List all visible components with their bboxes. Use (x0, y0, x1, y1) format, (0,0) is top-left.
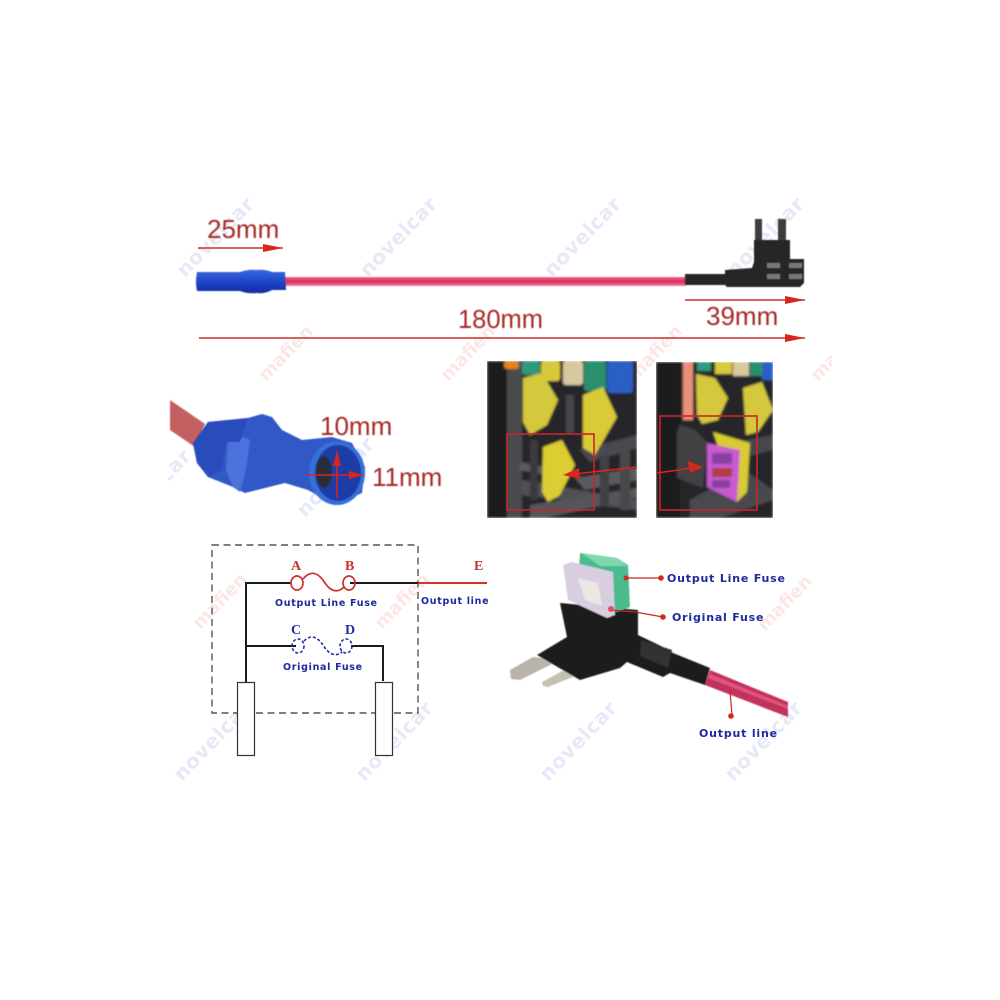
watermarks: novelcar (108, 444, 196, 533)
watermarks: novelcar (538, 192, 626, 281)
metal blades (510, 657, 560, 680)
watermarks: novelcar (721, 192, 809, 281)
callout box (507, 434, 594, 510)
dimension: 11mm: 11mm (372, 462, 442, 492)
dimension: 25mm: 25mm (207, 214, 279, 244)
panel: circuit schematic (212, 545, 489, 756)
letters (291, 559, 483, 638)
watermarks: novelcar (291, 432, 379, 521)
watermarks: novelcar (171, 192, 259, 281)
letters: D (345, 623, 355, 638)
letters: E (474, 559, 483, 574)
watermarks: novelcar (354, 192, 442, 281)
measurement arrows (307, 450, 364, 498)
label: output line: Output line (699, 727, 778, 740)
dimension: 180mm: 180mm (458, 306, 543, 334)
output line fuse symbol (291, 573, 355, 591)
red wire (705, 670, 788, 717)
watermarks: mafien (254, 321, 318, 385)
watermarks: novelcar (719, 696, 807, 785)
dimension: 39mm (685, 300, 805, 331)
pointer: output line (728, 690, 734, 719)
letters: A (291, 559, 302, 574)
label: output line fuse: Output Line Fuse (275, 598, 378, 609)
output line wire (418, 582, 487, 584)
watermarks: novelcar (350, 696, 438, 785)
icon: blue connector body (193, 414, 365, 505)
terminal blades (238, 682, 254, 756)
wiring (246, 583, 418, 682)
watermarks: novelcar (168, 696, 256, 785)
watermarks: mafien (806, 321, 870, 385)
label: output line: Output line (421, 596, 489, 607)
watermarks: mafien (436, 321, 500, 385)
panel: fuse tap photo (510, 553, 788, 740)
watermarks (168, 198, 832, 780)
label: output line fuse: Output Line Fuse (667, 572, 786, 585)
wire (284, 277, 686, 286)
watermarks: mafien (623, 321, 687, 385)
pointer: original fuse (608, 606, 666, 620)
letters: B (345, 559, 354, 574)
watermarks: mafien (370, 569, 434, 633)
watermarks: novelcar (534, 696, 622, 785)
icon: red wire end (170, 400, 205, 447)
label: original fuse: Original Fuse (672, 611, 764, 624)
lavender fuse (563, 562, 615, 618)
arrow (657, 461, 703, 473)
black plug and sheath (537, 603, 710, 685)
green fuse (578, 553, 630, 612)
dashed enclosure (212, 545, 418, 713)
icon: black fuse tap (685, 219, 804, 287)
icon: blue bullet connector (196, 270, 286, 293)
watermarks: mafien (188, 569, 252, 633)
watermarks: mafien (753, 571, 817, 635)
panel: fuse tap cable with dimensions (196, 214, 805, 338)
dimension: 39mm: 39mm (706, 301, 778, 331)
label: original fuse: Original Fuse (283, 662, 363, 673)
panel: fuse box before (487, 361, 637, 518)
arrow (563, 467, 637, 479)
panel: connector close-up (170, 400, 442, 505)
original fuse symbol (292, 637, 352, 655)
panel: fuse box after (656, 362, 773, 518)
pointer: output line fuse (624, 575, 664, 581)
callout box (660, 416, 757, 510)
dimension: 10mm: 10mm (320, 411, 392, 441)
letters: C (291, 623, 301, 638)
